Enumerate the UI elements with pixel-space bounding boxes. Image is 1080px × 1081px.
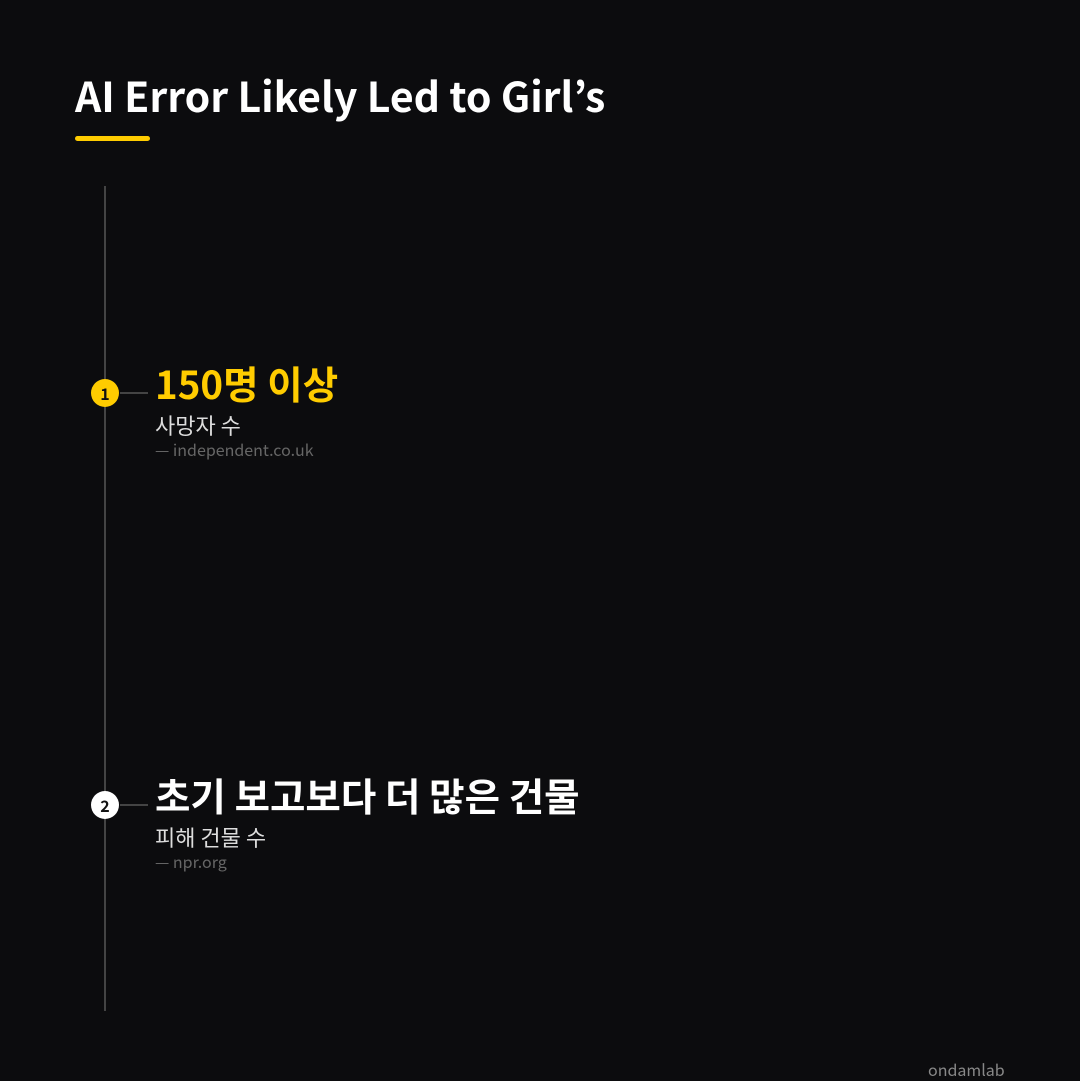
connector 2: [120, 804, 148, 806]
headline 2: 초기 보고보다 더 많은 건물: [155, 767, 580, 823]
headline 1: 150명 이상: [155, 355, 338, 411]
title: AI Error Likely Led to Girl’s: [75, 64, 605, 124]
label 2: 피해 건물 수: [155, 821, 266, 853]
label 1: 사망자 수: [155, 409, 241, 441]
connector 1: [120, 392, 148, 394]
source 2: — npr.org: [155, 849, 227, 873]
item 1: [91, 355, 338, 461]
footer brand: ondamlab: [928, 1057, 1005, 1081]
marker 2: [91, 791, 119, 819]
marker 1: [91, 379, 119, 407]
marker 1: 1: [100, 381, 110, 405]
marker 2: 2: [100, 793, 110, 817]
item 2: [91, 767, 580, 873]
timeline line: [104, 186, 106, 1011]
source 1: — independent.co.uk: [155, 437, 314, 461]
title underline: [75, 136, 150, 141]
